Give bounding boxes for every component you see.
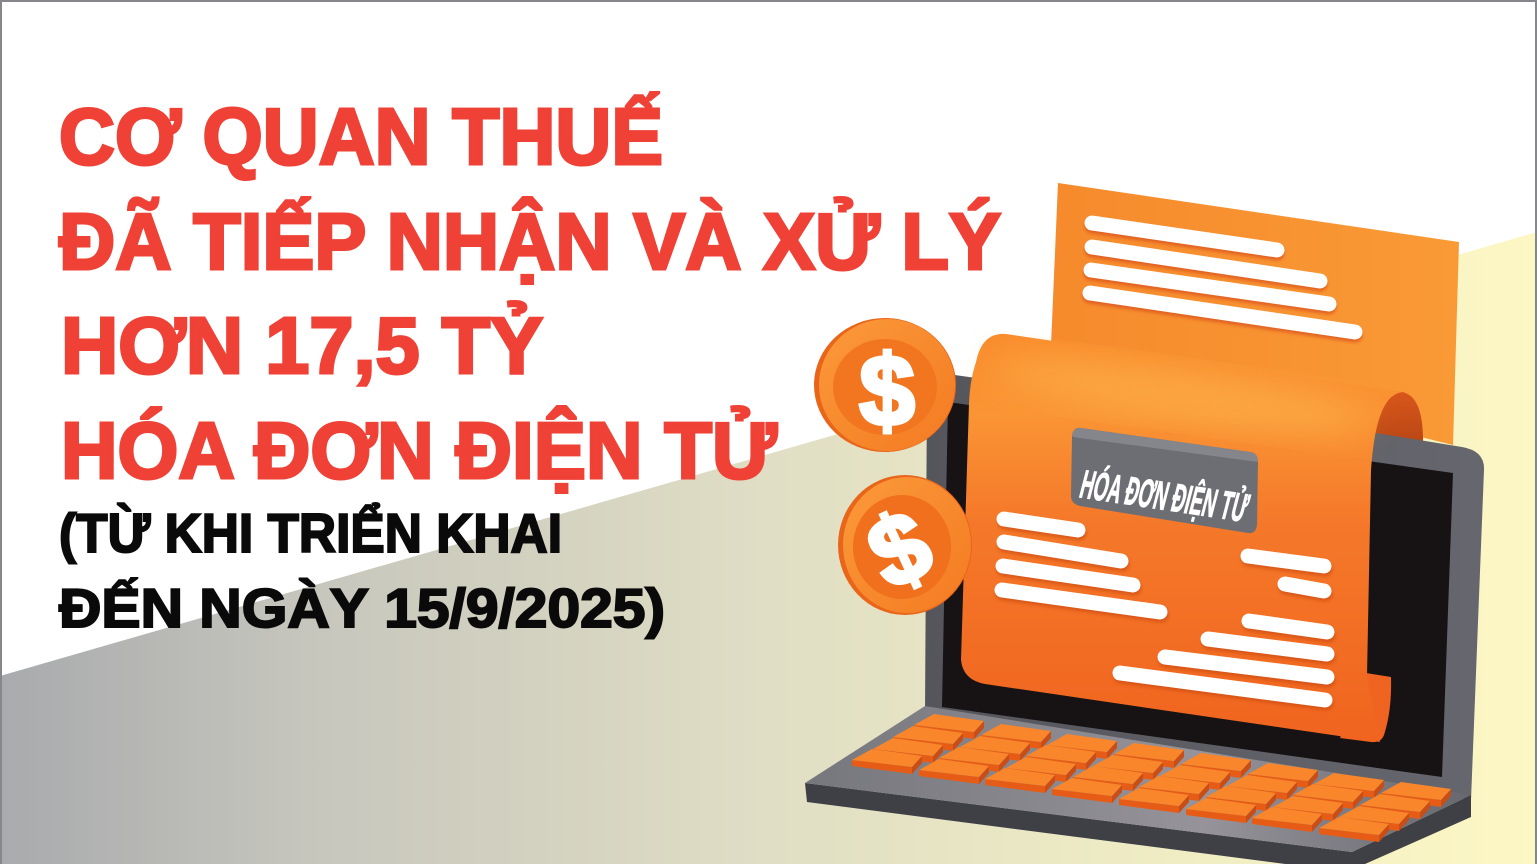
paper curl inner [1365,392,1423,480]
background: diagonal gradient panel [0,232,1537,864]
paper highlight [989,345,1371,445]
coin: top dollar: $ [859,335,915,447]
back paper sheet [1051,183,1459,445]
laptop screen [942,402,1453,777]
coin: lower dollar: $ [852,488,948,611]
subtitle: date note [59,502,665,639]
laptop illustration [805,183,1484,864]
front paper sheet [961,334,1402,742]
laptop base [805,706,1471,864]
keyboard [852,714,1451,842]
laptop screen frame [925,373,1484,800]
heading line 4: HÓA ĐƠN ĐIỆN TỬ [61,406,778,495]
heading line 1: CƠ QUAN THUẾ [59,92,663,181]
label: e-invoice badge [1071,428,1258,533]
subtitle line 2: ĐẾN NGÀY 15/9/2025) [59,577,665,639]
paper text lines [1002,519,1328,703]
coin: lower dollar [838,475,972,615]
heading line 2: ĐÃ TIẾP NHẬN VÀ XỬ LÝ [59,197,1001,286]
laptop illustration: HÓA ĐƠN ĐIỆN TỬ [1076,461,1254,531]
paper lower flap [1340,673,1391,742]
title: main heading [59,92,1001,495]
coin: top dollar [814,318,956,452]
subtitle line 1: (TỪ KHI TRIỂN KHAI [59,502,562,564]
heading line 3: HƠN 17,5 TỶ [61,301,543,390]
